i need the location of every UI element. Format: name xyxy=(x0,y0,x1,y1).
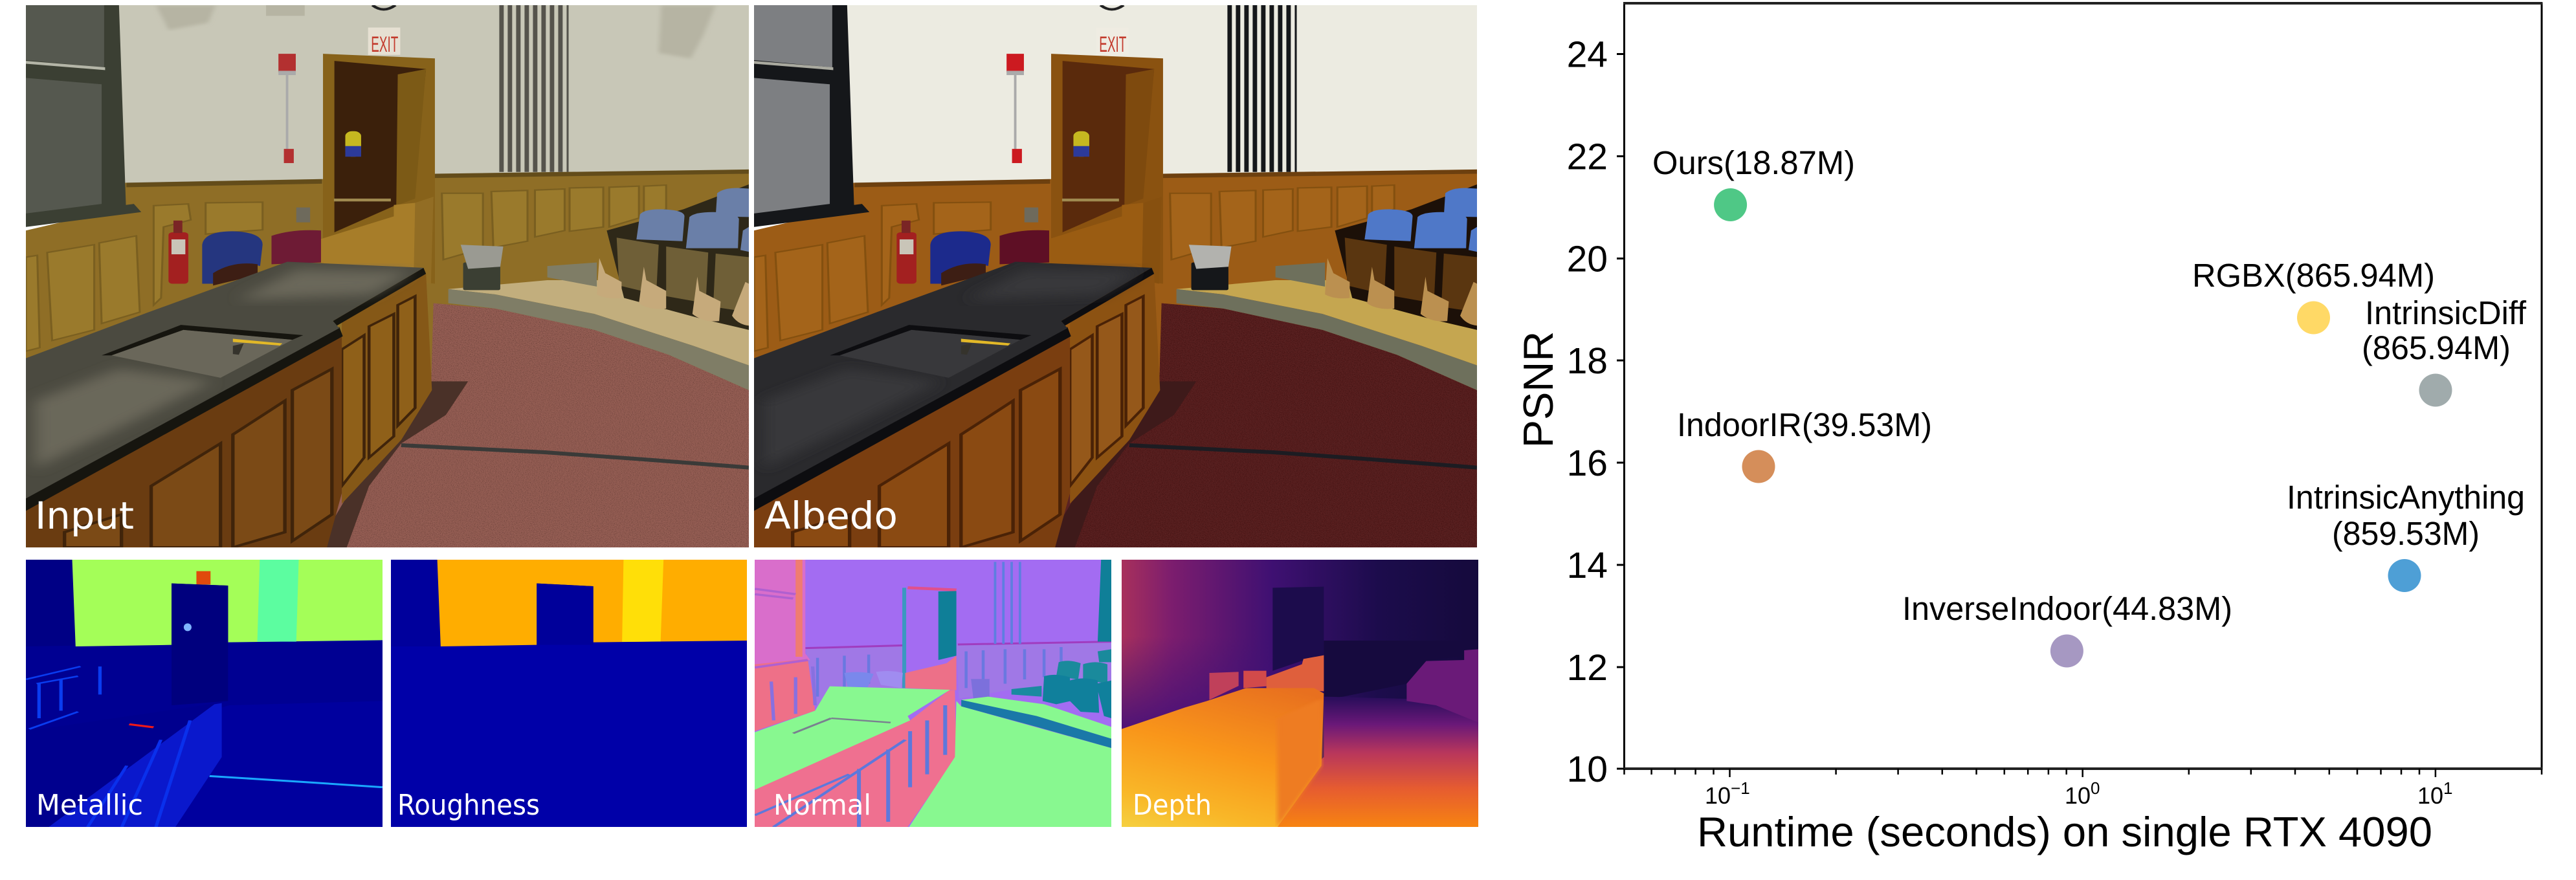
data point: IntrinsicAnything: (859.53M) xyxy=(2332,515,2480,552)
data point: IntrinsicDiff xyxy=(2362,294,2527,406)
x-axis tick labels: −1 xyxy=(1731,778,1750,798)
label: Roughness: Roughness xyxy=(397,789,540,822)
data point: Ours: Ours(18.87M) xyxy=(1652,144,1855,181)
panel: input photo xyxy=(26,5,749,547)
data point: RGBX: RGBX(865.94M) xyxy=(2192,257,2435,294)
label: Input: Input xyxy=(35,494,134,538)
label: Depth: Depth xyxy=(1133,789,1212,822)
x-axis tick labels xyxy=(1705,778,2453,809)
x-axis tick labels: 10 xyxy=(2065,782,2091,809)
panel: albedo map xyxy=(754,5,1477,547)
x-axis tick labels: 0 xyxy=(2091,778,2100,798)
y-axis tick labels: 20 xyxy=(1567,238,1608,280)
y-axis ticks xyxy=(1617,54,1624,769)
x-axis title: Runtime (seconds) on single RTX 4090 xyxy=(1697,808,2432,855)
data point: IntrinsicDiff: IntrinsicDiff xyxy=(2365,294,2527,331)
data point: Ours xyxy=(1652,144,1855,221)
data point: InverseIndoor: InverseIndoor(44.83M) xyxy=(1902,590,2232,627)
label: Normal: Normal xyxy=(773,789,871,822)
data point: IntrinsicDiff: (865.94M) xyxy=(2362,329,2511,366)
y-axis tick labels: 16 xyxy=(1567,443,1608,484)
data point: IndoorIR xyxy=(1677,406,1932,483)
y-axis tick labels: 22 xyxy=(1567,136,1608,177)
data point: IntrinsicAnything xyxy=(2287,479,2525,592)
y-axis tick labels: 24 xyxy=(1567,34,1608,75)
data point: InverseIndoor xyxy=(1902,590,2232,668)
y-axis tick labels: 12 xyxy=(1567,647,1608,688)
data point: IntrinsicAnything: IntrinsicAnything xyxy=(2287,479,2525,516)
x-axis tick labels: 1 xyxy=(2443,778,2453,798)
panel: roughness map xyxy=(391,560,747,827)
scatter chart: PSNR vs runtime xyxy=(1515,3,2542,855)
panel: normal map xyxy=(755,560,1111,827)
x-axis tick labels: 10 xyxy=(1705,782,1731,809)
label: Metallic: Metallic xyxy=(36,789,143,822)
data point: IndoorIR: IndoorIR(39.53M) xyxy=(1677,406,1932,443)
y-axis tick labels: 10 xyxy=(1567,749,1608,790)
x-axis tick labels: 10 xyxy=(2417,782,2443,809)
label: Albedo: Albedo xyxy=(764,494,898,538)
y-axis title: PSNR xyxy=(1515,331,1562,448)
data point: RGBX xyxy=(2192,257,2435,334)
panel: depth map xyxy=(1122,560,1478,827)
panel: metallic map xyxy=(26,560,383,827)
y-axis tick labels: 14 xyxy=(1567,545,1608,586)
x-axis ticks xyxy=(1625,769,2542,777)
y-axis tick labels xyxy=(1567,34,1608,790)
y-axis tick labels: 18 xyxy=(1567,340,1608,382)
chart frame xyxy=(1623,3,2542,769)
